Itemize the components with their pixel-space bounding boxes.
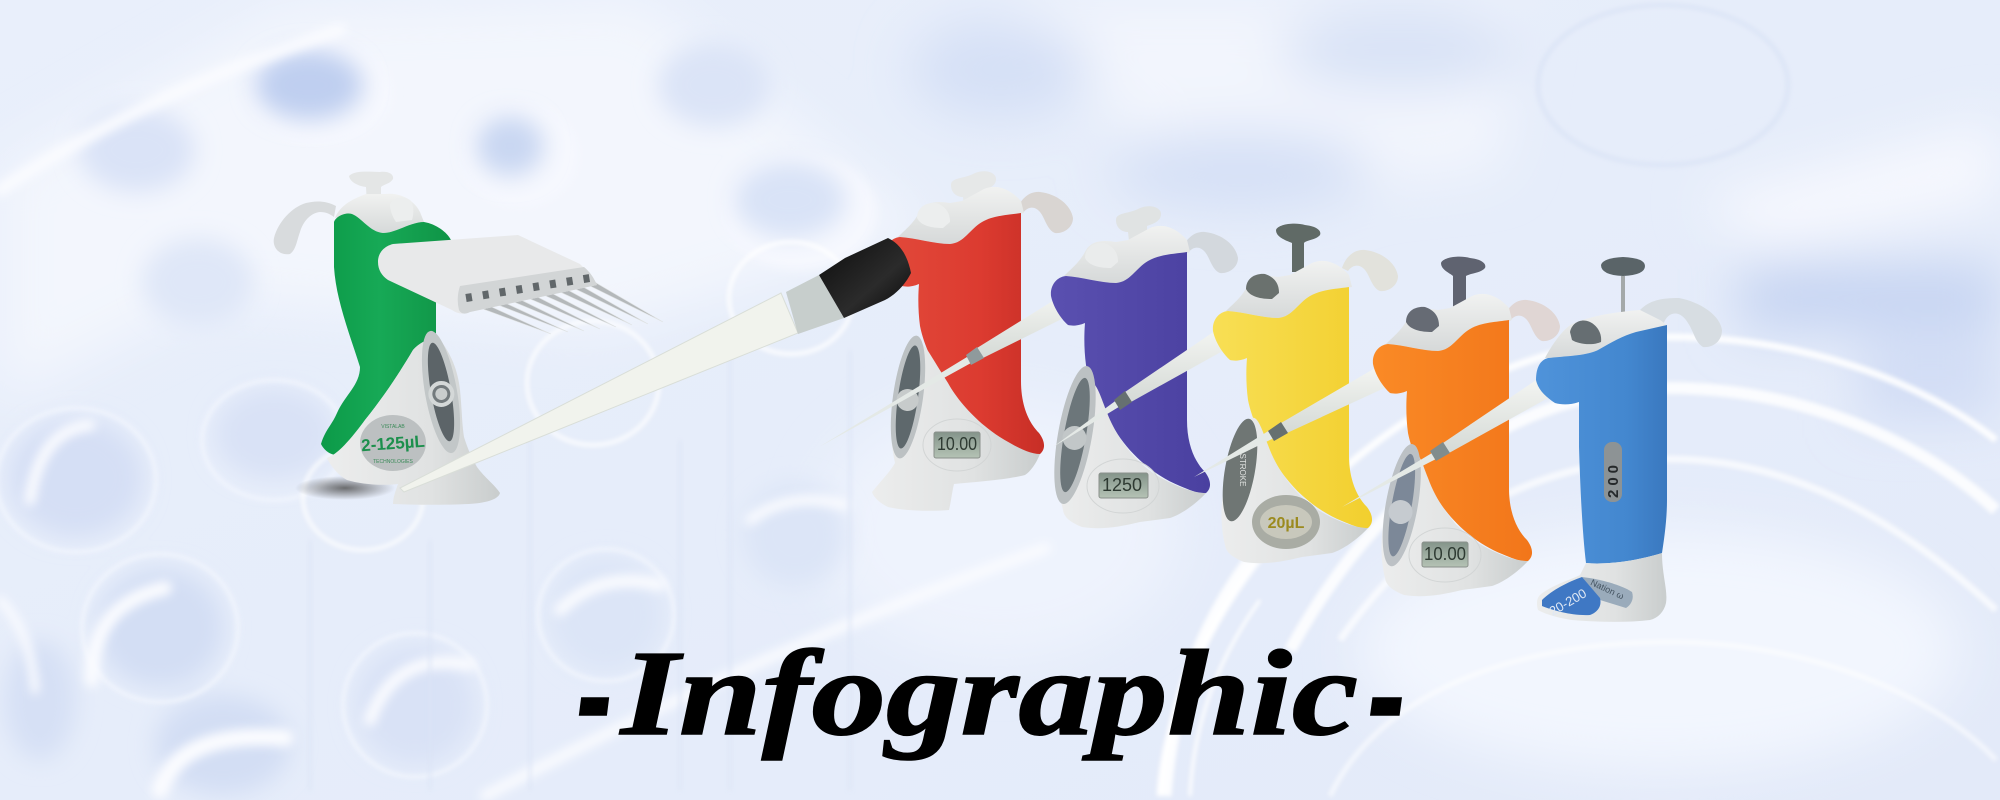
plunger knob (1601, 257, 1645, 276)
hook (1504, 300, 1560, 341)
collar cap (335, 194, 424, 233)
collar (1386, 294, 1512, 351)
button (1246, 274, 1279, 299)
LCD display: 10.00 (1424, 544, 1466, 564)
base badge: 20-200 (1546, 585, 1589, 619)
label badge: TECHNOLOGIES (373, 459, 414, 465)
tip (1342, 453, 1436, 507)
label badge: 2-125µL (361, 432, 425, 455)
pipette: green multichannel (274, 172, 663, 505)
collar (1064, 226, 1190, 283)
body (885, 213, 1044, 454)
base (1060, 383, 1206, 528)
tip (819, 357, 971, 447)
tip ring (786, 275, 844, 334)
shaft (1281, 357, 1404, 433)
shadow under green pipette (295, 476, 395, 500)
label badge: VISTALAB (381, 424, 405, 430)
base (1222, 418, 1368, 563)
stroke panel: STROKE (1238, 454, 1247, 486)
title (575, 614, 1406, 778)
control pad (1375, 441, 1428, 569)
control pad (885, 334, 931, 460)
tip (1053, 399, 1122, 447)
black adapter (819, 238, 911, 318)
hook (1640, 298, 1722, 347)
body (1373, 320, 1532, 561)
base badge (1542, 577, 1633, 619)
button (1570, 320, 1601, 344)
LCD display (1409, 528, 1481, 582)
base badge: Nation ω (1589, 577, 1625, 601)
LCD display: 1250 (1102, 475, 1142, 495)
manifold needles (464, 277, 663, 334)
plunger (951, 171, 996, 215)
tip collar (966, 347, 984, 365)
stroke panel (1216, 416, 1264, 524)
tip collar (1430, 442, 1450, 461)
plunger (1276, 224, 1320, 272)
label badge (360, 415, 426, 471)
pipette: yellow (1053, 224, 1398, 563)
base (1537, 553, 1666, 622)
pipette: orange (1194, 257, 1560, 596)
manifold (378, 235, 597, 314)
control pad (1046, 363, 1104, 507)
control pad (414, 328, 468, 456)
plunger (1116, 206, 1161, 250)
button (390, 198, 413, 222)
volume counter (1604, 442, 1622, 502)
shaft (1443, 368, 1566, 453)
title: word: Infographic (619, 626, 1358, 761)
LCD display (1087, 459, 1159, 513)
hook (1182, 232, 1238, 273)
tip (1194, 430, 1274, 477)
translucent tip (400, 293, 798, 492)
collar (898, 187, 1024, 244)
shaft (1125, 318, 1246, 402)
title: leading dash: - (575, 614, 613, 778)
hook (1017, 192, 1073, 233)
body (1213, 287, 1372, 528)
plunger (349, 172, 393, 205)
label badge (1252, 495, 1320, 549)
hook (1342, 250, 1398, 291)
button (1406, 307, 1439, 332)
hook (274, 201, 336, 254)
body (1051, 252, 1210, 493)
plunger rod (1621, 276, 1625, 314)
tip collar (1114, 391, 1132, 410)
base (1382, 451, 1528, 596)
LCD display (923, 419, 991, 471)
LCD display: 10.00 (937, 434, 977, 454)
body (1536, 325, 1667, 563)
title: trailing dash: - (1366, 614, 1406, 778)
plunger (1441, 257, 1485, 310)
collar (1226, 261, 1352, 318)
pipette: blue (1342, 257, 1722, 622)
pipette: red with large tip (400, 171, 1073, 511)
base (872, 343, 1040, 511)
button (917, 203, 950, 228)
body (321, 213, 451, 455)
tip collar (1268, 422, 1288, 441)
base (327, 339, 500, 505)
button (1085, 243, 1118, 268)
pipette: purple (819, 206, 1238, 528)
label badge: 20µL (1268, 515, 1305, 532)
volume counter: 200 (1605, 461, 1622, 498)
collar (1545, 310, 1667, 358)
shaft (977, 284, 1092, 358)
